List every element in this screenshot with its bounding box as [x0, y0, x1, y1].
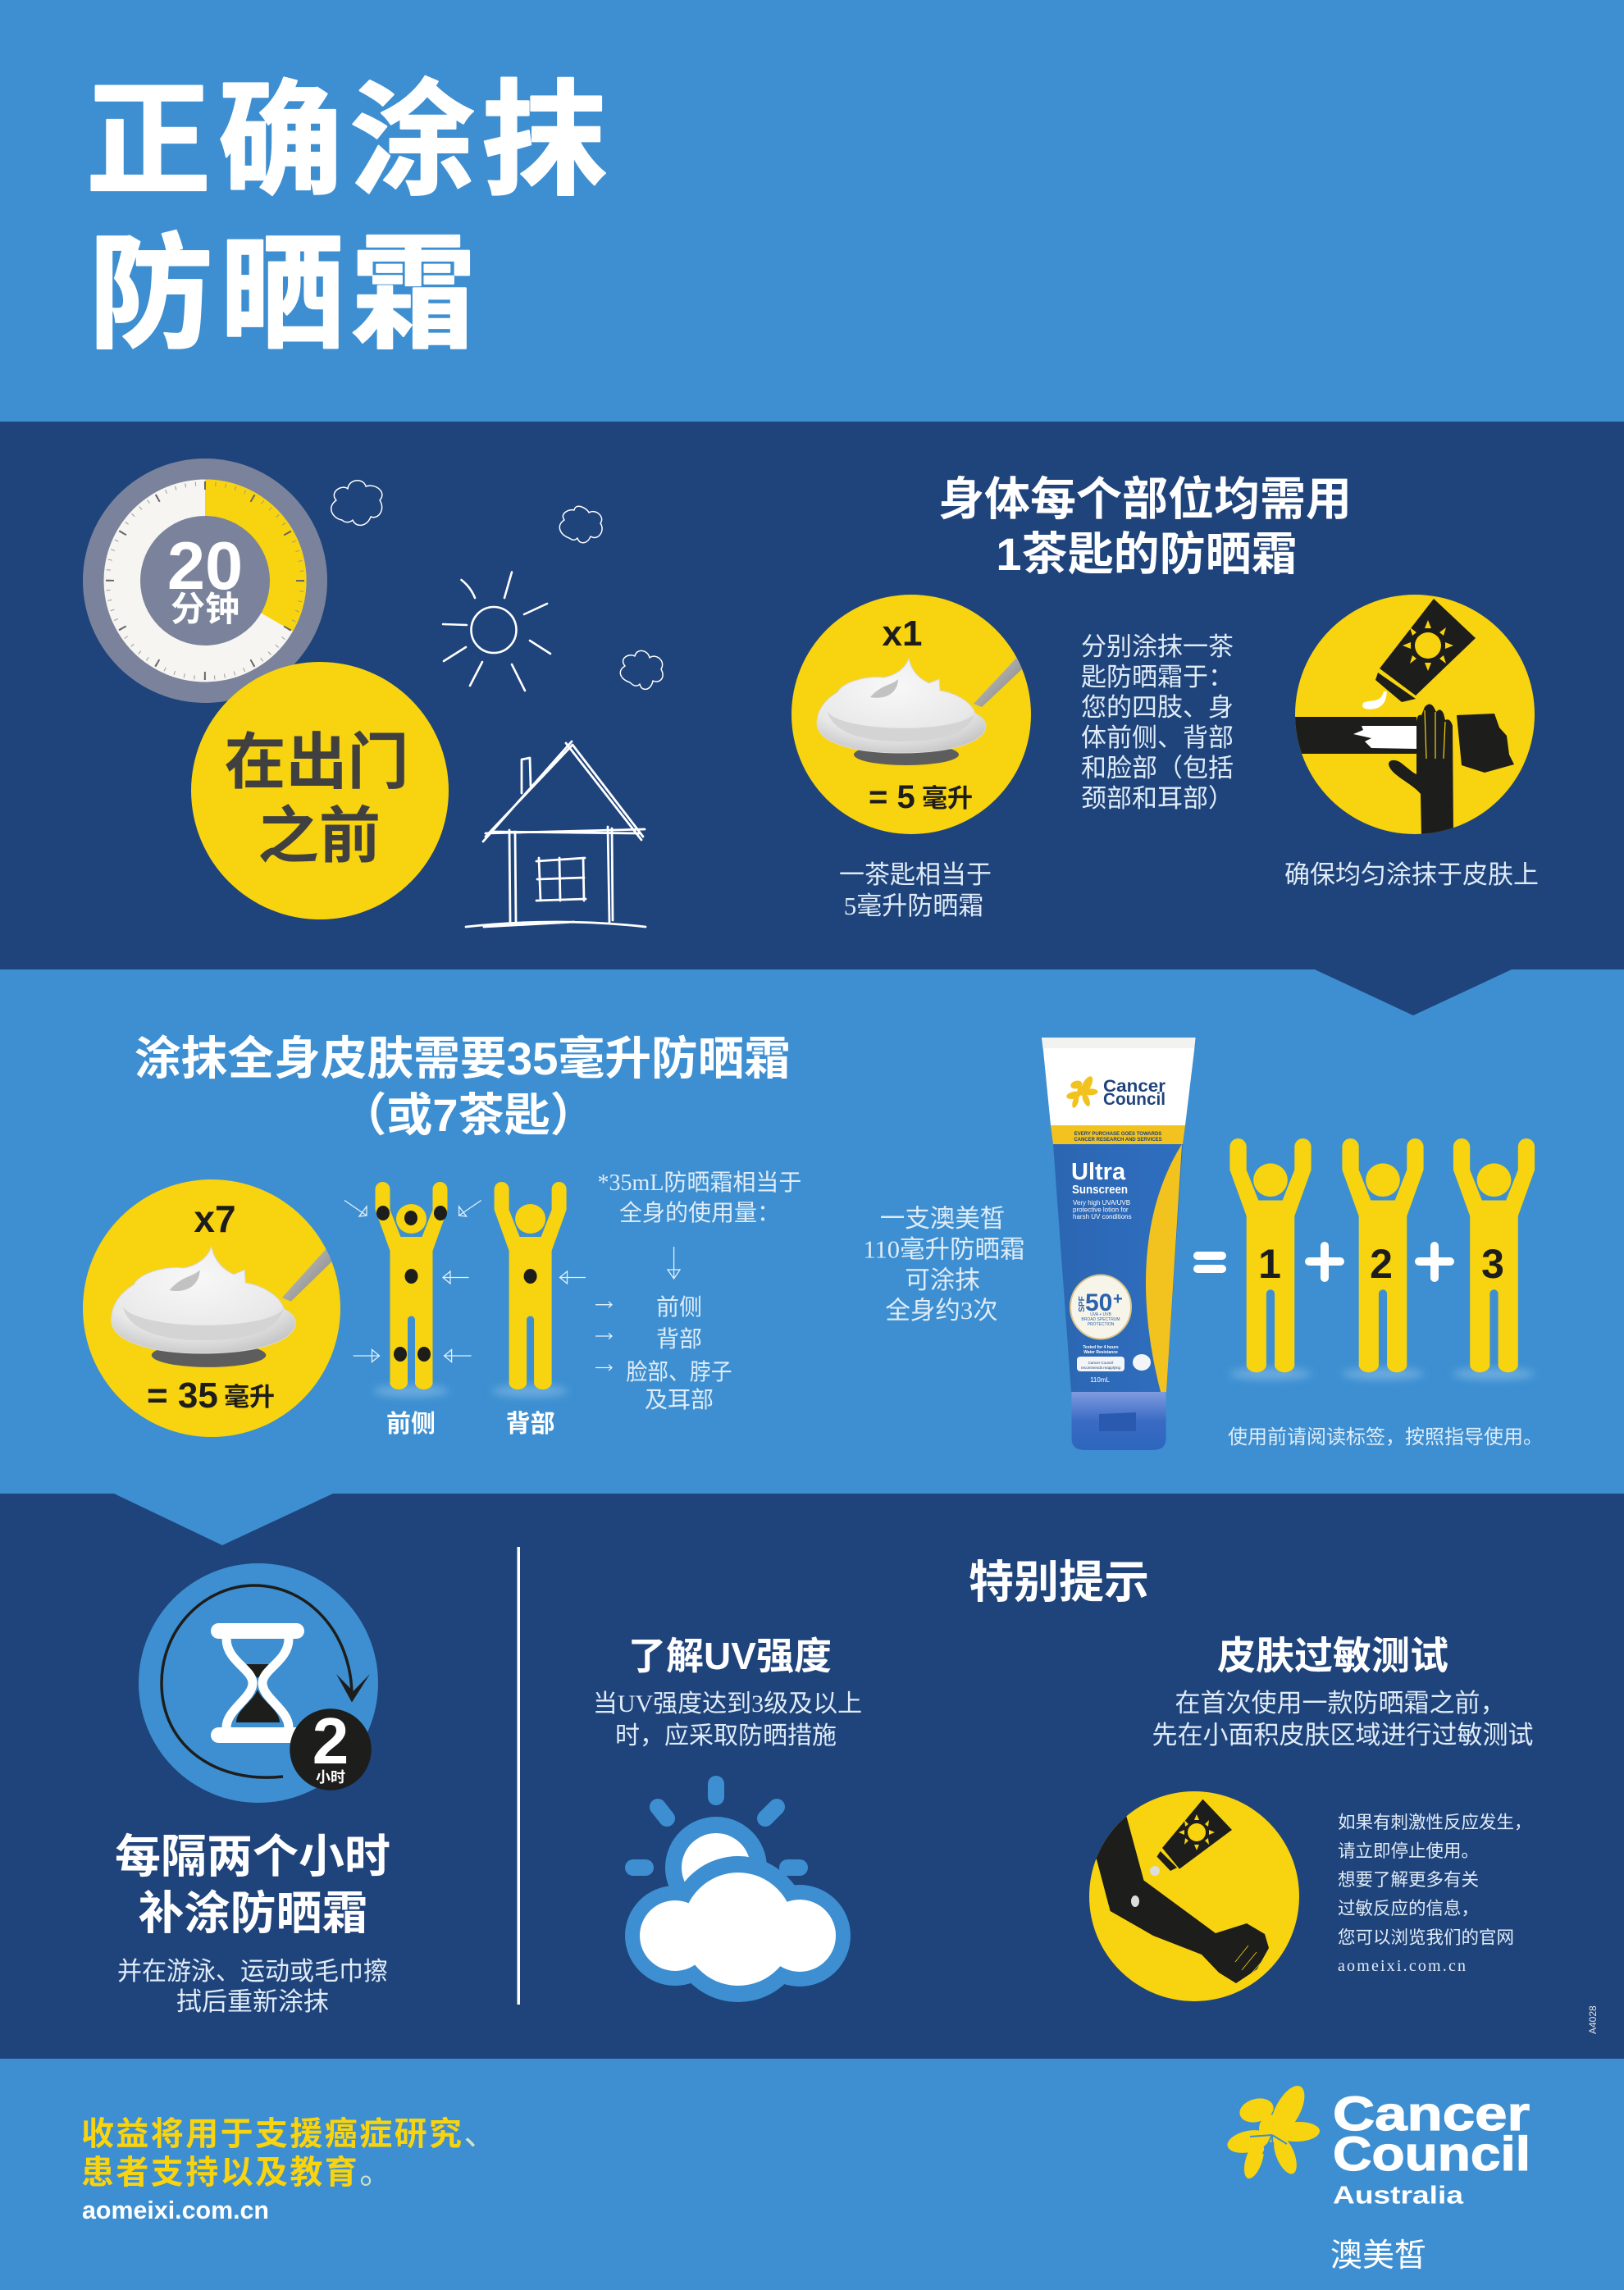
text: body amount note: 全身的使用量： — [619, 1200, 780, 1226]
text: where to apply: 分别涂抹一茶 — [1081, 632, 1234, 661]
panel: title band — [0, 0, 1624, 422]
text: reapply note — [117, 1957, 388, 2016]
product: sunscreen tube: harsh UV conditions — [1073, 1213, 1132, 1220]
text: body amount note — [598, 1170, 801, 1413]
icon: seven teaspoons: 毫升 — [224, 1383, 275, 1412]
figure: back — [492, 1182, 568, 1438]
logo wordmark: Council — [1333, 2128, 1530, 2181]
product: sunscreen tube: protective lotion for — [1073, 1206, 1129, 1214]
text: where to apply: 颈部和耳部） — [1081, 784, 1234, 813]
text: body amount note: 前侧 — [656, 1294, 702, 1321]
callout: before leaving home: 之前 — [258, 801, 381, 870]
product: sunscreen tube: Very high UVA/UVB — [1073, 1199, 1130, 1207]
title: 正确涂抹 — [86, 71, 614, 211]
block: UV intensity: 时，应采取防晒措施 — [615, 1722, 837, 1749]
caption: teaspoon — [839, 860, 992, 920]
icon: one teaspoon: x1 — [883, 614, 922, 654]
block: UV intensity — [593, 1635, 862, 1749]
icon: plus — [1309, 1246, 1340, 1278]
text: tube coverage: 110毫升防晒霜 — [863, 1236, 1025, 1264]
product: sunscreen tube: EVERY PURCHASE GOES TOWARDS — [1074, 1132, 1161, 1137]
figure: two — [1342, 1138, 1424, 1380]
icon: sketched house — [466, 741, 645, 927]
heading: reapply: 补涂防晒霜 — [138, 1887, 367, 1939]
callout: before leaving home — [191, 662, 449, 919]
product: sunscreen tube: + — [1113, 1290, 1123, 1308]
heading: special tips: 特别提示 — [969, 1557, 1149, 1608]
icon: seven teaspoons: = 35 — [147, 1375, 218, 1416]
text: proceeds statement: 患者支持以及教育。 — [81, 2155, 395, 2191]
product: sunscreen tube: PROTECTION — [1088, 1322, 1115, 1327]
text: allergy reaction advice: 过敏反应的信息， — [1338, 1899, 1479, 1918]
product: sunscreen tube: UVA + UVB — [1090, 1312, 1111, 1317]
figure: front — [373, 1182, 449, 1438]
product: sunscreen tube: Cancer — [1103, 1077, 1166, 1096]
icon: seven teaspoons: x7 — [194, 1197, 236, 1240]
logo: Cancer Council Australia — [1225, 2081, 1530, 2274]
text: tube coverage — [863, 1205, 1025, 1325]
text: proceeds statement — [81, 2116, 499, 2224]
figure: three — [1453, 1138, 1535, 1380]
text: allergy reaction advice — [1338, 1813, 1532, 1975]
text: allergy reaction advice: aomeixi.com.cn — [1338, 1957, 1466, 1975]
arrow: light chevron — [114, 1494, 333, 1545]
text: allergy reaction advice: 您可以浏览我们的官网 — [1338, 1928, 1514, 1948]
text: body amount note: 及耳部 — [645, 1387, 714, 1413]
panel: reapply and special tips — [0, 1494, 1624, 2059]
panel: footer — [0, 2059, 1624, 2290]
product: sunscreen tube: 50 — [1085, 1289, 1112, 1316]
text: body amount note: *35mL防晒霜相当于 — [598, 1170, 801, 1196]
block: UV intensity: 当UV强度达到3级及以上 — [593, 1690, 862, 1718]
icon: sketched cloud — [620, 650, 663, 689]
icon: one teaspoon: = 5 — [869, 779, 915, 815]
callout: before leaving home: 在出门 — [224, 728, 409, 796]
heading: 涂抹全身皮肤需要35毫升防晒霜 — [135, 1033, 791, 1084]
product: sunscreen tube: recommends reapplying — [1081, 1366, 1121, 1370]
block: allergy test — [1152, 1634, 1534, 1749]
panel: before going out — [0, 422, 1624, 969]
caption: teaspoon: 一茶匙相当于 — [839, 860, 992, 889]
text: reapply note: 拭后重新涂抹 — [176, 1987, 329, 2016]
logo wordmark: Cancer — [1333, 2087, 1530, 2141]
icon: hourglass two hours: 小时 — [316, 1769, 345, 1786]
icon: plus — [1419, 1246, 1450, 1278]
arrow: dark chevron — [1315, 969, 1512, 1015]
arrows: application points — [344, 1201, 680, 1371]
heading: reapply: 每隔两个小时 — [115, 1831, 390, 1882]
icon: test on arm — [1083, 1791, 1299, 2001]
figure: one — [1229, 1138, 1312, 1380]
text: body amount note: 脸部、脖子 — [627, 1359, 732, 1385]
figure: back: 背部 — [506, 1411, 555, 1438]
icon: 20 minute timer — [83, 458, 327, 703]
text: reapply note: 并在游泳、运动或毛巾擦 — [117, 1957, 388, 1986]
icon: sketched cloud — [559, 506, 602, 543]
icon: 20 minute timer: 分钟 — [171, 590, 239, 628]
product: sunscreen tube: CANCER RESEARCH AND SERVICES — [1074, 1138, 1162, 1143]
heading — [135, 1033, 791, 1141]
text: tube coverage: 一支澳美皙 — [880, 1205, 1005, 1233]
product: sunscreen tube: Cancer Council — [1088, 1361, 1113, 1365]
text: proceeds statement: 收益将用于支援癌症研究、 — [81, 2116, 499, 2152]
heading — [938, 473, 1352, 580]
icon: hourglass two hours — [139, 1563, 378, 1803]
block: allergy test: 先在小面积皮肤区域进行过敏测试 — [1152, 1721, 1534, 1749]
icon: 20 minute timer: 20 — [167, 527, 243, 604]
heading: （或7茶匙） — [340, 1089, 596, 1141]
panel: full body amount — [83, 969, 1535, 1450]
icon: one teaspoon — [791, 595, 1031, 834]
text: where to apply — [1081, 632, 1234, 813]
block: allergy test: 在首次使用一款防晒霜之前， — [1175, 1689, 1506, 1718]
product: sunscreen tube: 110mL — [1090, 1376, 1110, 1384]
icon: daffodil — [1225, 2081, 1320, 2181]
product: sunscreen tube: Council — [1103, 1090, 1166, 1109]
icon: one teaspoon: 毫升 — [922, 784, 973, 813]
heading: reapply — [115, 1831, 390, 1939]
text: where to apply: 匙防晒霜于： — [1081, 663, 1234, 691]
text: allergy reaction advice: 如果有刺激性反应发生， — [1338, 1813, 1532, 1832]
product: sunscreen tube: Ultra — [1071, 1159, 1126, 1185]
text: body amount note: 背部 — [656, 1326, 702, 1353]
caption: teaspoon: 5毫升防晒霜 — [844, 892, 983, 920]
icon: sun and cloud — [625, 1784, 851, 2002]
product: sunscreen tube: Sunscreen — [1072, 1183, 1128, 1197]
title — [86, 71, 614, 364]
icon: seven teaspoons — [83, 1179, 340, 1437]
product: sunscreen tube — [1042, 1038, 1196, 1450]
icon: sketched sun — [443, 572, 550, 691]
figure: front: 前侧 — [386, 1411, 436, 1438]
product: sunscreen tube: BROAD SPECTRUM — [1081, 1317, 1120, 1322]
text: tube coverage: 全身约3次 — [885, 1297, 998, 1325]
text: allergy reaction advice: 请立即停止使用。 — [1338, 1841, 1479, 1861]
heading: 身体每个部位均需用 — [938, 473, 1352, 525]
caption: apply evenly: 确保均匀涂抹于皮肤上 — [1284, 860, 1539, 889]
block: UV intensity: 了解UV强度 — [628, 1635, 832, 1677]
equation: three full body applications — [1193, 1138, 1535, 1380]
logo wordmark: Australia — [1333, 2181, 1464, 2210]
text: tube coverage: 可涂抹 — [905, 1266, 980, 1294]
logo wordmark: 澳美皙 — [1330, 2238, 1426, 2274]
figure: three: 3 — [1481, 1241, 1504, 1287]
title: 防晒霜 — [89, 225, 482, 364]
icon: sketched cloud — [331, 481, 382, 525]
heading: 1茶匙的防晒霜 — [996, 528, 1298, 580]
figure: two: 2 — [1370, 1241, 1393, 1287]
figure: one: 1 — [1258, 1241, 1281, 1287]
product: sunscreen tube: Water Resistance — [1083, 1350, 1118, 1355]
logo wordmark — [1330, 2087, 1530, 2274]
product: sunscreen tube: SPF — [1078, 1296, 1087, 1312]
text: where to apply: 体前侧、背部 — [1081, 723, 1234, 752]
text: document code: A4028 — [1587, 2005, 1599, 2034]
product: sunscreen tube: Tested for 4 hours — [1083, 1345, 1119, 1350]
caption: read the label: 使用前请阅读标签，按照指导使用。 — [1228, 1426, 1543, 1448]
text: proceeds statement: aomeixi.com.cn — [82, 2196, 269, 2224]
icon: applying sunscreen to arm — [1292, 595, 1535, 837]
icon: hourglass two hours: 2 — [312, 1704, 349, 1777]
text: allergy reaction advice: 想要了解更多有关 — [1338, 1870, 1479, 1890]
text: where to apply: 您的四肢、身 — [1081, 693, 1234, 722]
text: where to apply: 和脸部（包括 — [1081, 754, 1234, 782]
icon: equals — [1193, 1252, 1226, 1273]
block: allergy test: 皮肤过敏测试 — [1217, 1634, 1448, 1677]
